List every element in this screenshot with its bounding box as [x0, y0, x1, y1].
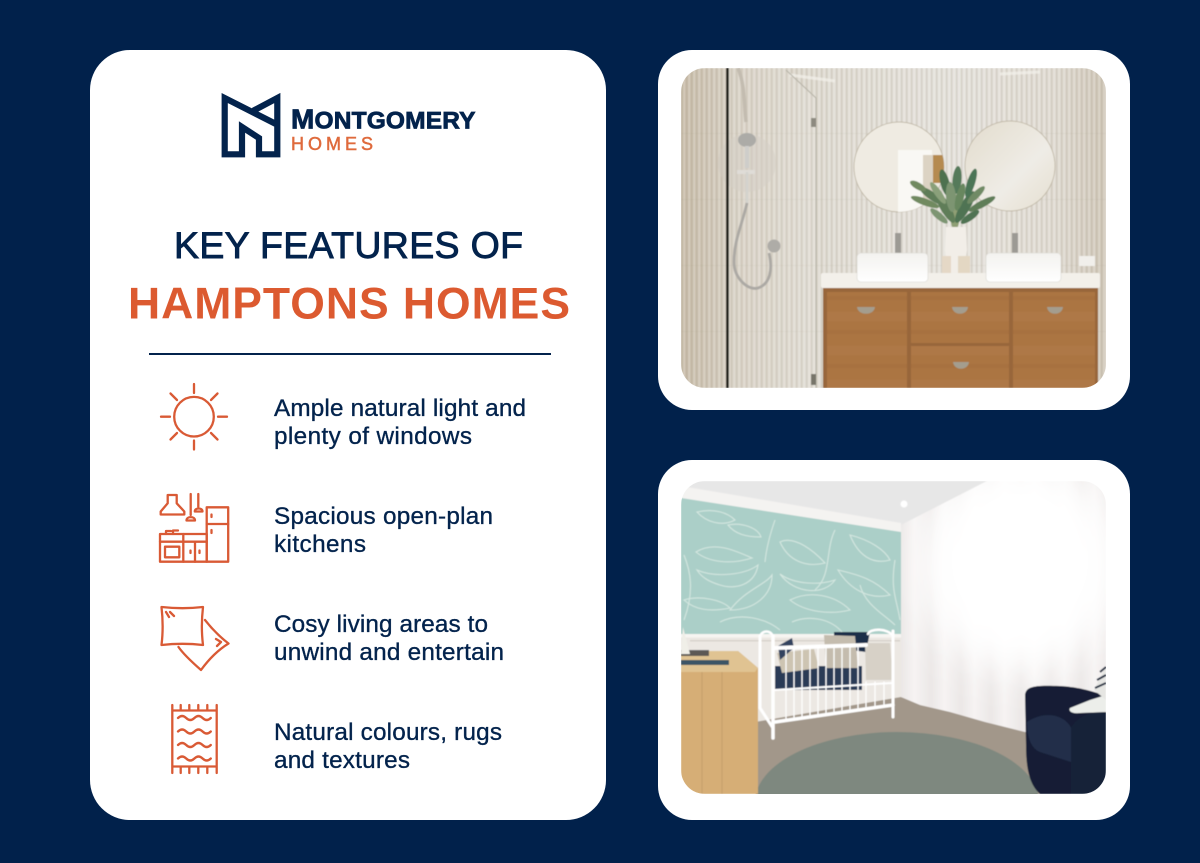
plant	[908, 166, 997, 230]
logo mark	[225, 98, 277, 154]
illustration: nursery	[681, 481, 1106, 794]
ceiling	[689, 481, 986, 524]
counter	[821, 273, 1100, 288]
logo subtitle: HOMES	[291, 134, 373, 154]
shower	[732, 68, 781, 290]
feature: kitchens	[160, 494, 493, 562]
rug	[756, 732, 1038, 794]
wallpaper	[681, 498, 901, 634]
panel: bathroom photo	[658, 50, 1130, 410]
carpet	[757, 696, 1040, 794]
cornice	[681, 486, 901, 534]
mirrors	[854, 122, 944, 212]
glass screen	[732, 69, 780, 290]
heading line 2: HAMPTONS HOMES	[128, 279, 570, 328]
text: Spacious open-plan	[274, 503, 493, 530]
feature: natural light	[161, 384, 526, 450]
sinks	[857, 253, 928, 282]
heading	[128, 224, 570, 328]
dresser	[681, 668, 759, 794]
armchair	[1025, 666, 1106, 794]
tiled wall	[681, 68, 1106, 388]
vanity	[823, 288, 1098, 388]
vase and tray	[945, 227, 967, 273]
whale pattern	[684, 511, 900, 632]
text: Natural colours, rugs	[274, 719, 502, 746]
text: and textures	[274, 747, 410, 774]
crib	[760, 630, 893, 738]
text: Cosy living areas to	[274, 611, 488, 638]
icon: rug	[172, 705, 217, 773]
logo wordmark: MONTGOMERY	[291, 104, 476, 134]
icon: sun	[161, 384, 227, 450]
text: Ample natural light and	[274, 395, 526, 422]
heading line 1: KEY FEATURES OF	[174, 224, 523, 266]
taps	[895, 233, 901, 253]
icon: kitchen	[160, 494, 228, 562]
switch	[1079, 256, 1095, 266]
feature: living areas	[162, 607, 504, 670]
handles	[857, 307, 1063, 369]
text: kitchens	[274, 531, 366, 558]
panel: nursery photo	[658, 460, 1130, 820]
text: plenty of windows	[274, 423, 472, 450]
logo: Montgomery Homes	[225, 98, 476, 154]
panel: key features	[90, 50, 606, 820]
text: unwind and entertain	[274, 639, 504, 666]
feature: natural colours	[172, 705, 502, 774]
wainscot	[681, 636, 901, 730]
icon: cushions	[162, 607, 228, 670]
curtains	[900, 481, 1106, 733]
illustration: bathroom	[681, 68, 1106, 388]
